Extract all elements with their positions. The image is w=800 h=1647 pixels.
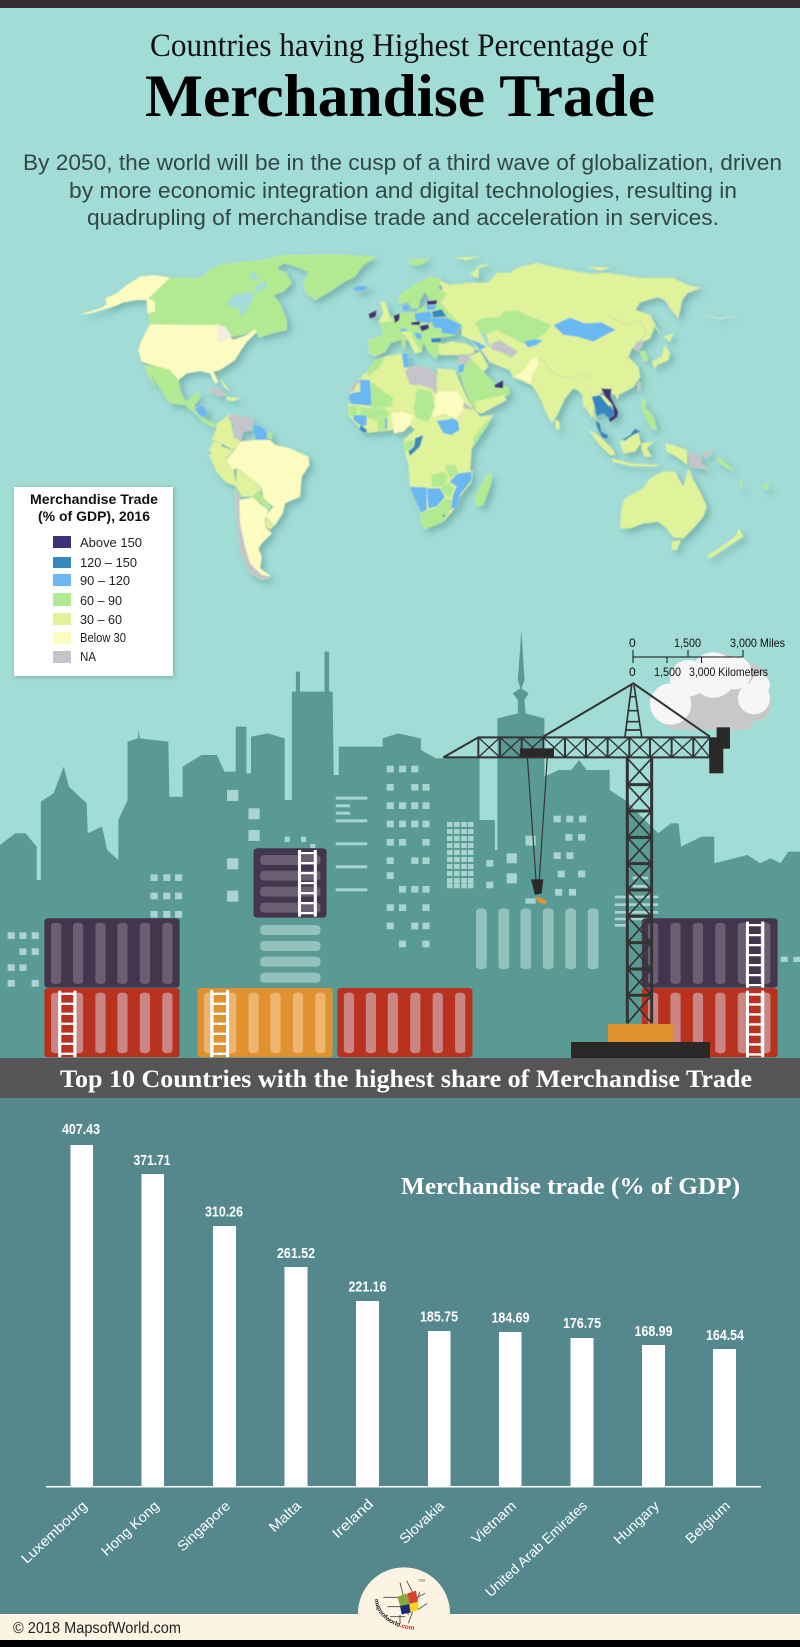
logo squares (397, 1591, 419, 1614)
container: right purple (642, 918, 778, 988)
crane top and tie cables (543, 683, 710, 737)
crane mast (627, 757, 652, 1023)
section banner (0, 1058, 800, 1098)
map: north america (80, 254, 377, 428)
map scale bar: 3,000 Miles (730, 636, 785, 650)
legend rows: 120 – 150 (80, 555, 137, 570)
legend rows: Above 150 (80, 535, 142, 550)
trolley (520, 748, 554, 757)
top bar (0, 0, 800, 8)
value labels: 168.99 (634, 1323, 672, 1340)
map: africa (347, 353, 493, 529)
country labels: Belgium (682, 1497, 733, 1547)
logo wordmark (374, 1599, 419, 1631)
crane (443, 683, 730, 1023)
crane base (571, 1024, 710, 1058)
container: left purple (44, 918, 180, 988)
world map (80, 254, 768, 580)
country labels: Luxembourg (18, 1497, 90, 1566)
cloud (650, 652, 772, 730)
value labels: 261.52 (277, 1245, 315, 1262)
value labels: 221.16 (348, 1278, 386, 1296)
chart panel (0, 1098, 800, 1614)
intro text (23, 150, 782, 230)
country labels (18, 1495, 733, 1600)
counterweight (709, 727, 730, 773)
legend title (30, 491, 158, 524)
country labels: Malta (265, 1497, 304, 1535)
value labels: 164.54 (706, 1327, 745, 1344)
intro text: quadrupling of merchandise trade and acceleration in services. (87, 205, 719, 230)
intro text: by more economic integration and digital technologies, resulting in (69, 178, 737, 203)
map scale bar: 1,500 (654, 665, 681, 679)
legend title: Merchandise Trade (30, 491, 158, 507)
value labels: 176.75 (563, 1315, 601, 1332)
logo grid lines (383, 1581, 427, 1623)
map: south america (209, 414, 309, 580)
map: europe and middle east (368, 257, 552, 413)
map: east and southeast asia (540, 267, 740, 430)
country labels: Singapore (174, 1497, 233, 1554)
bars (70, 1145, 736, 1487)
container: hanging purple (254, 848, 327, 918)
country labels: Vietnam (468, 1497, 519, 1547)
logo: mapsofworld.com (374, 1599, 414, 1630)
building windows (8, 766, 800, 987)
bar chart (18, 1121, 761, 1600)
value labels: 184.69 (492, 1310, 530, 1326)
value labels: 407.43 (62, 1121, 100, 1138)
container: right red (642, 988, 778, 1057)
ghost container bars (260, 908, 598, 983)
tall window grid (447, 822, 473, 888)
container: left red (44, 988, 180, 1057)
axis (46, 1486, 761, 1488)
container: middle red (337, 988, 472, 1057)
value labels (62, 1121, 745, 1344)
legend rows: 60 – 90 (80, 593, 122, 608)
legend rows: 30 – 60 (80, 612, 122, 627)
country labels: Hong Kong (98, 1497, 162, 1559)
map: indonesia and oceania (588, 420, 768, 558)
legend title: (% of GDP), 2016 (38, 508, 150, 524)
country labels: Ireland (329, 1495, 376, 1541)
crane jib (443, 737, 710, 757)
country labels: United Arab Emirates (482, 1497, 590, 1600)
legend rows (53, 535, 142, 664)
map scale bar: 1,500 (674, 636, 701, 650)
legend rows: 90 – 120 (80, 573, 130, 588)
title (145, 28, 655, 129)
bottom black strip (0, 1640, 800, 1647)
value labels: 185.75 (420, 1308, 458, 1326)
map scale bar (629, 636, 785, 679)
intro text: By 2050, the world will be in the cusp of a third wave of globalization, driven (23, 150, 782, 175)
map scale bar: 3,000 Kilometers (689, 665, 768, 679)
hook and cables (527, 757, 547, 904)
skyline (0, 630, 800, 1060)
map: russia and asia (438, 263, 700, 423)
footer band (0, 1614, 800, 1641)
country labels: Hungary (610, 1497, 662, 1547)
legend rows: Below 30 (80, 630, 126, 645)
skyline silhouette (0, 630, 800, 1060)
copyright: © 2018 MapsofWorld.com (13, 1620, 181, 1637)
trademark: TM (419, 1578, 425, 1583)
logo (358, 1567, 450, 1630)
container: orange (197, 988, 333, 1057)
title: Countries having Highest Percentage of (150, 28, 648, 64)
legend rows: NA (80, 649, 96, 664)
country labels: Slovakia (396, 1497, 447, 1547)
map scale bar: 0 (629, 636, 636, 650)
value labels: 371.71 (134, 1152, 170, 1169)
map legend (14, 487, 173, 676)
value labels: 310.26 (205, 1204, 243, 1220)
section banner: Top 10 Countries with the highest share of Merchandise Trade (60, 1066, 752, 1093)
map scale bar: 0 (629, 665, 636, 679)
chart title: Merchandise trade (% of GDP) (401, 1174, 740, 1200)
title: Merchandise Trade (145, 63, 655, 129)
